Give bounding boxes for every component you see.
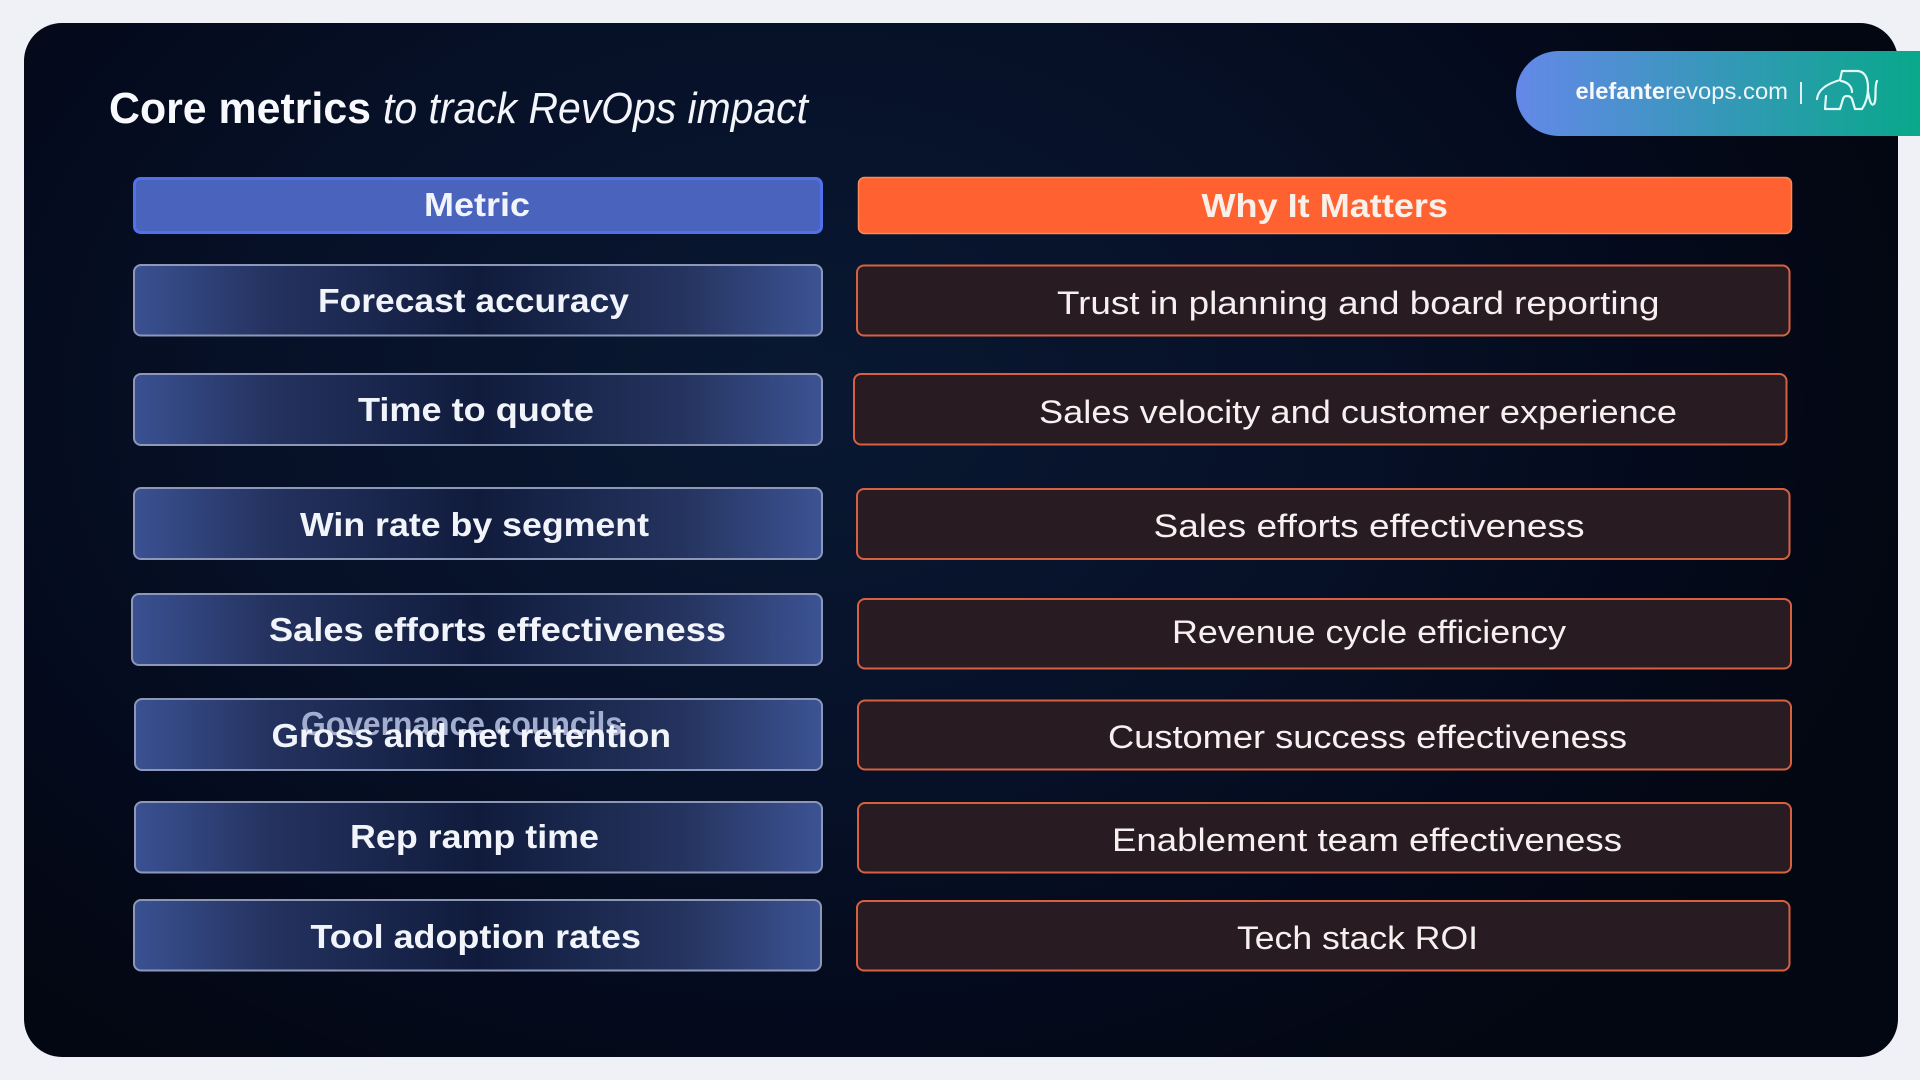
row: Sales velocity and customer experience <box>854 374 1786 444</box>
row: Sales efforts effectiveness: Sales efforts effectiveness <box>269 611 726 648</box>
row: Gross and net retention, overlapping Governance councils: Governance councils <box>301 705 623 742</box>
row: Revenue cycle efficiency <box>858 599 1791 668</box>
logo text <box>1576 78 1804 104</box>
row: Sales velocity and customer experience: Sales velocity and customer experience <box>1039 394 1677 430</box>
row: Gross and net retention, overlapping Governance councils <box>135 699 822 770</box>
row: Trust in planning and board reporting: Trust in planning and board reporting <box>1057 285 1660 321</box>
header: Metric <box>134 178 822 232</box>
row: Enablement team effectiveness <box>858 803 1791 872</box>
row: Trust in planning and board reporting <box>857 266 1790 336</box>
logo text: revops.com <box>1665 78 1788 104</box>
panel: metric column <box>132 178 822 970</box>
row: Sales efforts effectiveness: Sales efforts effectiveness <box>1154 508 1584 544</box>
header: Why It Matters <box>858 178 1792 234</box>
row: Enablement team effectiveness: Enablement team effectiveness <box>1112 822 1622 858</box>
logo badge <box>1516 51 1920 136</box>
row: Customer success effectiveness <box>858 700 1791 770</box>
row: Win rate by segment <box>134 488 822 559</box>
logo text: elefante <box>1576 78 1665 104</box>
panel: why it matters column <box>854 178 1792 970</box>
row: Customer success effectiveness: Customer success effectiveness <box>1108 719 1627 755</box>
row: Tool adoption rates: Tool adoption rates <box>310 918 641 955</box>
row: Revenue cycle efficiency: Revenue cycle efficiency <box>1172 614 1566 650</box>
title <box>109 84 810 133</box>
header: Metric: Metric <box>424 186 530 223</box>
row: Tech stack ROI: Tech stack ROI <box>1237 920 1478 956</box>
row: Rep ramp time: Rep ramp time <box>350 818 599 855</box>
row: Forecast accuracy: Forecast accuracy <box>318 282 630 319</box>
row: Sales efforts effectiveness <box>857 489 1790 559</box>
header: Why It Matters: Why It Matters <box>1202 187 1448 224</box>
row: Tech stack ROI <box>857 901 1790 970</box>
row: Sales efforts effectiveness <box>132 594 822 665</box>
row: Forecast accuracy <box>134 265 822 336</box>
icon: elephant <box>1817 71 1877 109</box>
title: to track RevOps impact <box>383 84 810 133</box>
title: Core metrics <box>109 84 371 133</box>
row: Time to quote: Time to quote <box>358 391 594 428</box>
logo text: | <box>1798 78 1804 104</box>
row: Rep ramp time <box>135 802 822 872</box>
row: Tool adoption rates <box>134 900 821 970</box>
row: Win rate by segment: Win rate by segment <box>300 506 649 543</box>
row: Gross and net retention, overlapping Governance councils: Gross and net retention <box>272 717 671 754</box>
row: Time to quote <box>134 374 822 445</box>
